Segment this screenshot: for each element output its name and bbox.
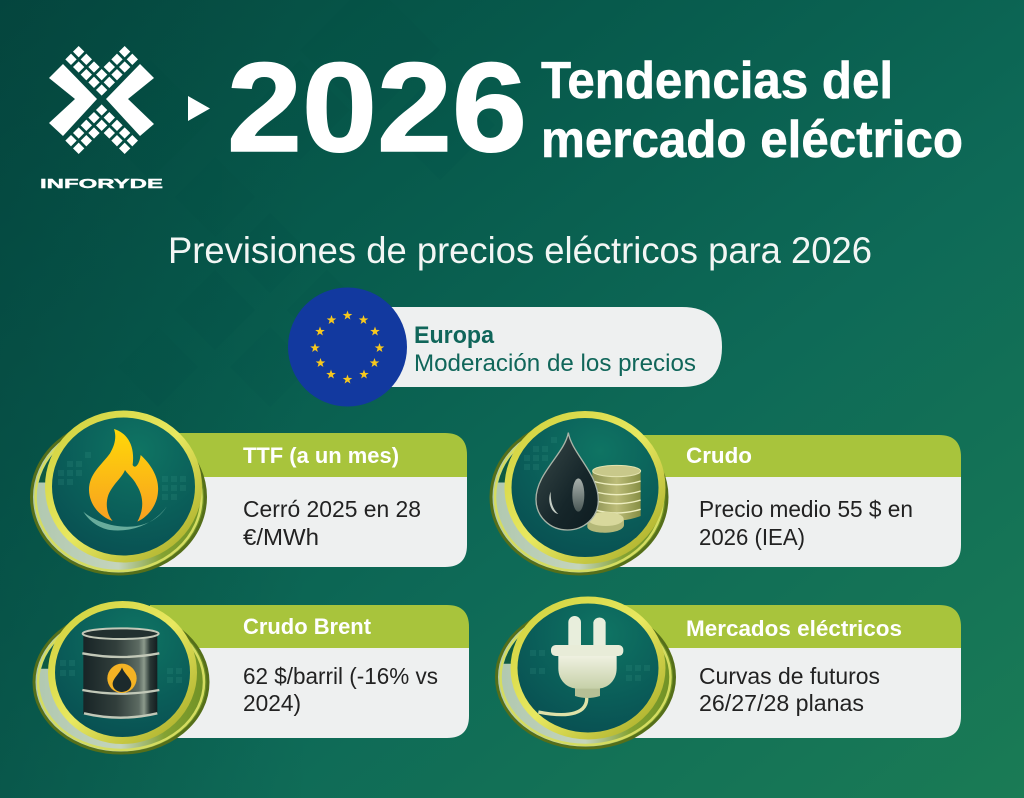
body text (699, 496, 913, 550)
logo: Inforyde (40, 46, 164, 191)
panel: Europa (288, 288, 722, 406)
body text: 2024) (243, 690, 301, 716)
body text (243, 663, 438, 716)
badge rings (34, 604, 208, 753)
title: year: 2026 (227, 36, 527, 178)
Europa description: Moderación de los precios (414, 350, 696, 377)
logo wordmark: INFORYDE (40, 176, 164, 191)
Europa heading: Europa (414, 322, 495, 349)
card header (150, 433, 467, 477)
icon: electric plug (538, 616, 623, 715)
panel: Mercados eléctricos (496, 600, 961, 748)
heading: Crudo (686, 443, 752, 468)
panel: TTF (32, 414, 467, 574)
icon: oil barrel (82, 628, 159, 719)
heading: TTF (a un mes) (243, 443, 399, 468)
body text: Precio medio 55 $ en (699, 496, 913, 522)
heading: Crudo Brent (243, 614, 372, 639)
card body (620, 648, 961, 738)
card header (610, 435, 961, 477)
body text: 2026 (IEA) (699, 524, 805, 550)
body text: Cerró 2025 en 28 (243, 496, 421, 522)
icon: EU flag (288, 288, 407, 406)
logo mark: X of chevrons and diamonds (49, 46, 154, 154)
badge rings (491, 414, 667, 574)
icon: flame (83, 429, 167, 531)
heading: Mercados eléctricos (686, 616, 902, 641)
panel: Crudo (491, 414, 961, 574)
subtitle: Previsiones de precios eléctricos para 2026 (168, 230, 872, 271)
body text: Curvas de futuros (699, 663, 880, 689)
badge rings (32, 414, 206, 574)
body text: 62 $/barril (-16% vs (243, 663, 438, 689)
card header (150, 605, 469, 648)
title: Tendencias del mercado eléctrico (541, 52, 963, 169)
body text: €/MWh (243, 524, 319, 550)
pill background (340, 307, 722, 387)
card body (150, 477, 467, 567)
body text: 26/27/28 planas (699, 690, 864, 716)
card header (620, 605, 961, 648)
arrow: play triangle (188, 96, 210, 121)
panel: Crudo Brent (34, 604, 469, 753)
body text (243, 496, 421, 550)
card body (150, 648, 469, 738)
icon: oil drop and coins (536, 433, 641, 533)
body text (699, 663, 880, 716)
badge rings (496, 600, 674, 748)
title: Tendencias del mercado eléctrico: mercado eléctrico (541, 111, 963, 169)
title: Tendencias del mercado eléctrico: Tendencias del (541, 52, 893, 110)
card body (610, 477, 961, 567)
